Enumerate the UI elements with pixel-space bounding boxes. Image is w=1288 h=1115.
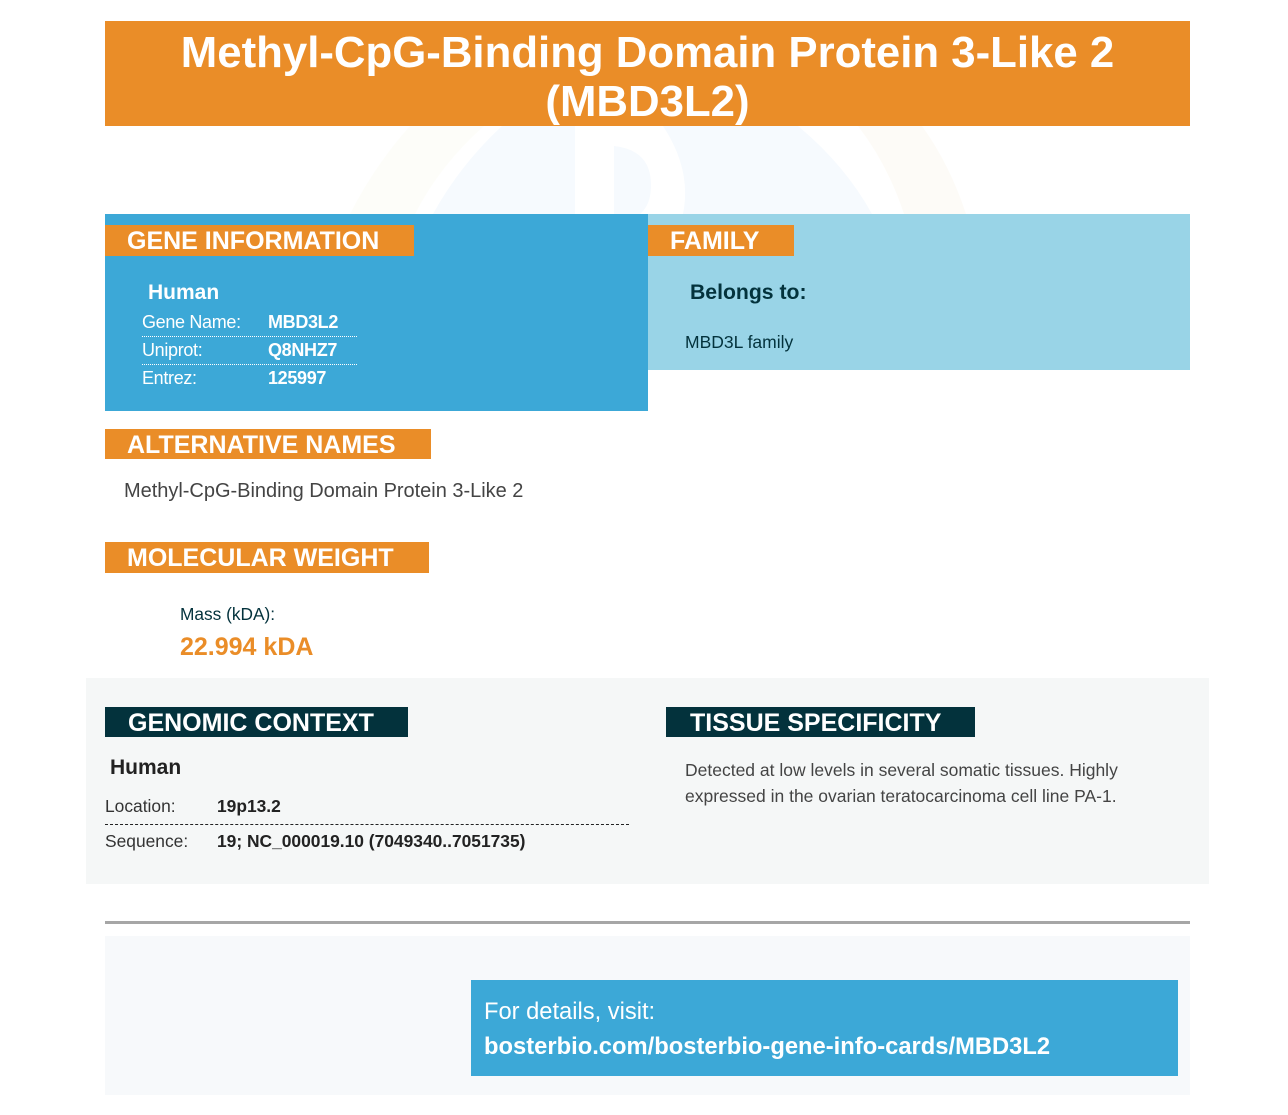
panel: footer	[105, 936, 1190, 1095]
panel: genomic context and tissue specificity	[86, 678, 1209, 884]
uniprot row: Q8NHZ7	[268, 340, 337, 360]
alternative names text: Methyl-CpG-Binding Domain Protein 3-Like 2	[124, 480, 523, 502]
species label: Human	[110, 756, 181, 779]
heading: family: FAMILY	[670, 227, 759, 255]
heading: gene information: GENE INFORMATION	[127, 227, 379, 255]
title	[105, 21, 1190, 126]
tissue specificity text	[685, 760, 1118, 806]
panel: gene information	[105, 214, 648, 411]
mass value: 22.994 kDA	[180, 633, 313, 661]
mass label: Mass (kDA):	[180, 604, 275, 624]
location row: Location:	[105, 796, 176, 816]
uniprot row	[142, 337, 357, 365]
gene name row	[142, 309, 357, 337]
entrez row	[142, 368, 326, 388]
title: (MBD3L2)	[545, 77, 750, 126]
sequence row: Sequence:	[105, 831, 188, 851]
location row: 19p13.2	[217, 796, 281, 816]
entrez row: Entrez:	[142, 368, 197, 388]
tissue specificity text: expressed in the ovarian teratocarcinoma cell line PA-1.	[685, 786, 1117, 806]
callout: details link	[471, 980, 1178, 1076]
mass block	[180, 604, 313, 661]
details label: For details, visit:	[484, 999, 655, 1025]
watermark logo	[434, 126, 872, 214]
sequence row: 19; NC_000019.10 (7049340..7051735)	[217, 831, 525, 851]
heading: family	[648, 225, 794, 256]
family value: MBD3L family	[685, 332, 793, 352]
heading: genomic context: GENOMIC CONTEXT	[128, 709, 374, 737]
uniprot row: Uniprot:	[142, 340, 202, 360]
panel: family	[648, 214, 1190, 370]
heading: tissue specificity: TISSUE SPECIFICITY	[690, 709, 941, 737]
gene name row: MBD3L2	[268, 312, 338, 332]
gene name row: Gene Name:	[142, 312, 241, 332]
heading: alternative names: ALTERNATIVE NAMES	[127, 431, 396, 459]
location row	[105, 792, 629, 825]
entrez row: 125997	[268, 368, 326, 388]
species label: Human	[148, 281, 219, 304]
tissue specificity text: Detected at low levels in several somatic tissues. Highly	[685, 760, 1118, 780]
belongs to label: Belongs to:	[690, 281, 807, 304]
title: Methyl-CpG-Binding Domain Protein 3-Like 2	[181, 28, 1114, 77]
details url: bosterbio.com/bosterbio-gene-info-cards/MBD3L2	[484, 1033, 1050, 1060]
heading: molecular weight: MOLECULAR WEIGHT	[127, 544, 394, 572]
